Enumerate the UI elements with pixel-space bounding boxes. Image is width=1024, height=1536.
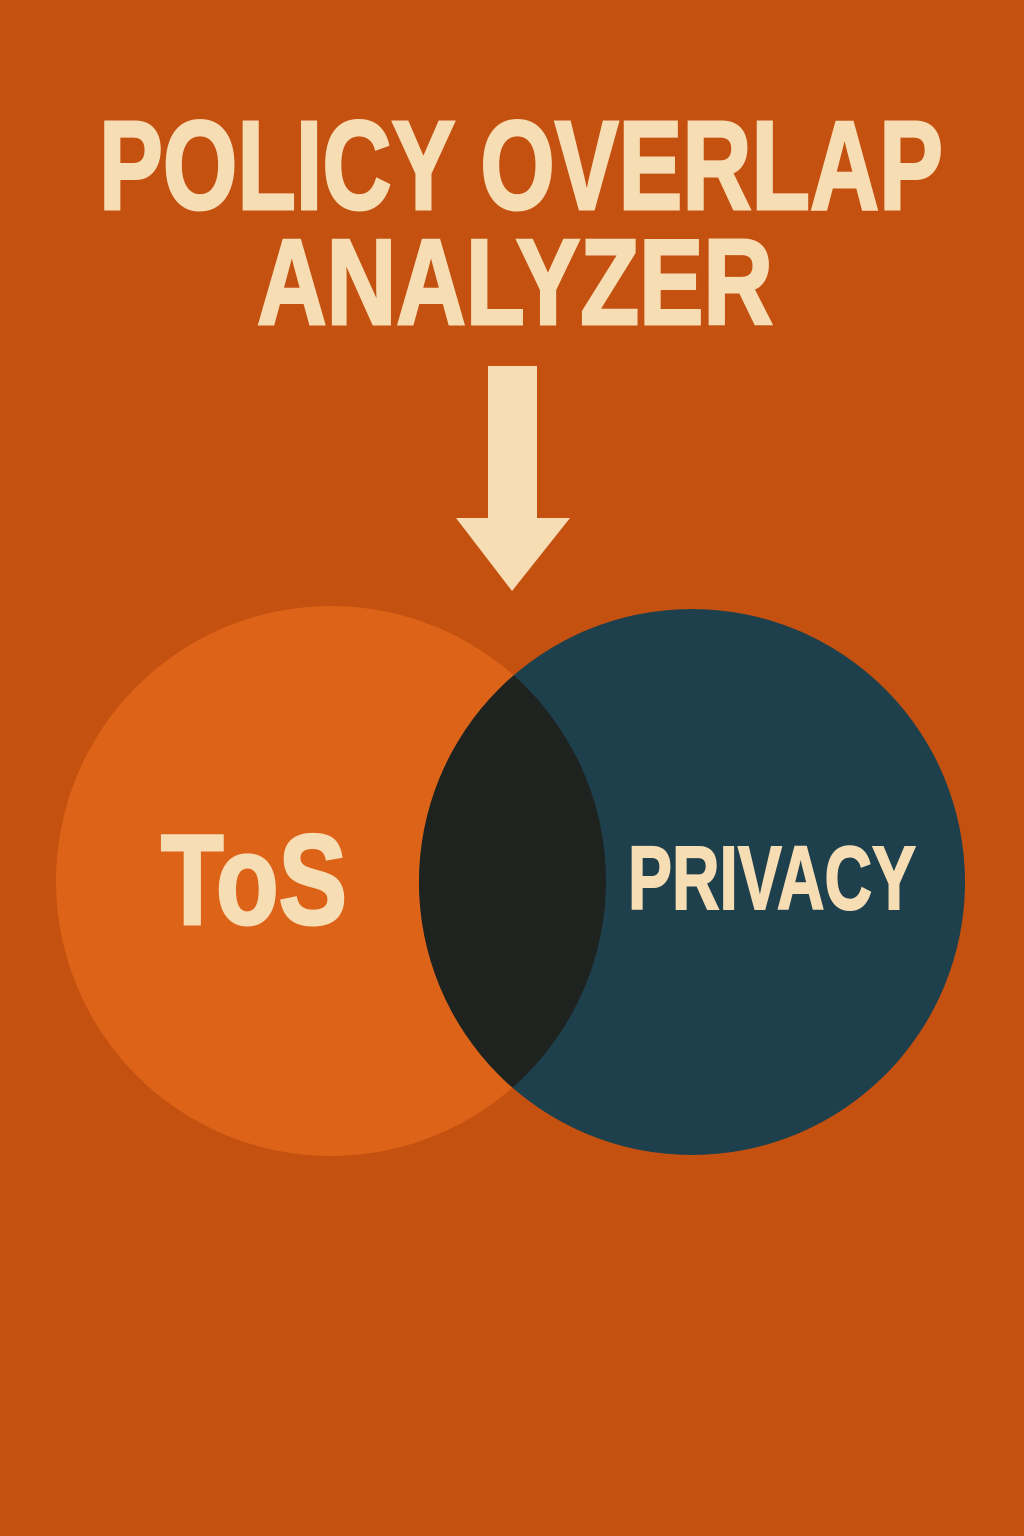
title [99, 95, 943, 350]
overlap region [419, 676, 606, 1088]
label: ToS: ToS [161, 809, 347, 952]
circle: ToS [56, 606, 606, 1156]
arrow: down [456, 366, 570, 591]
venn diagram [56, 606, 965, 1156]
title: ANALYZER [257, 214, 773, 350]
circle: Privacy [419, 609, 965, 1155]
label: PRIVACY: PRIVACY [628, 829, 916, 929]
